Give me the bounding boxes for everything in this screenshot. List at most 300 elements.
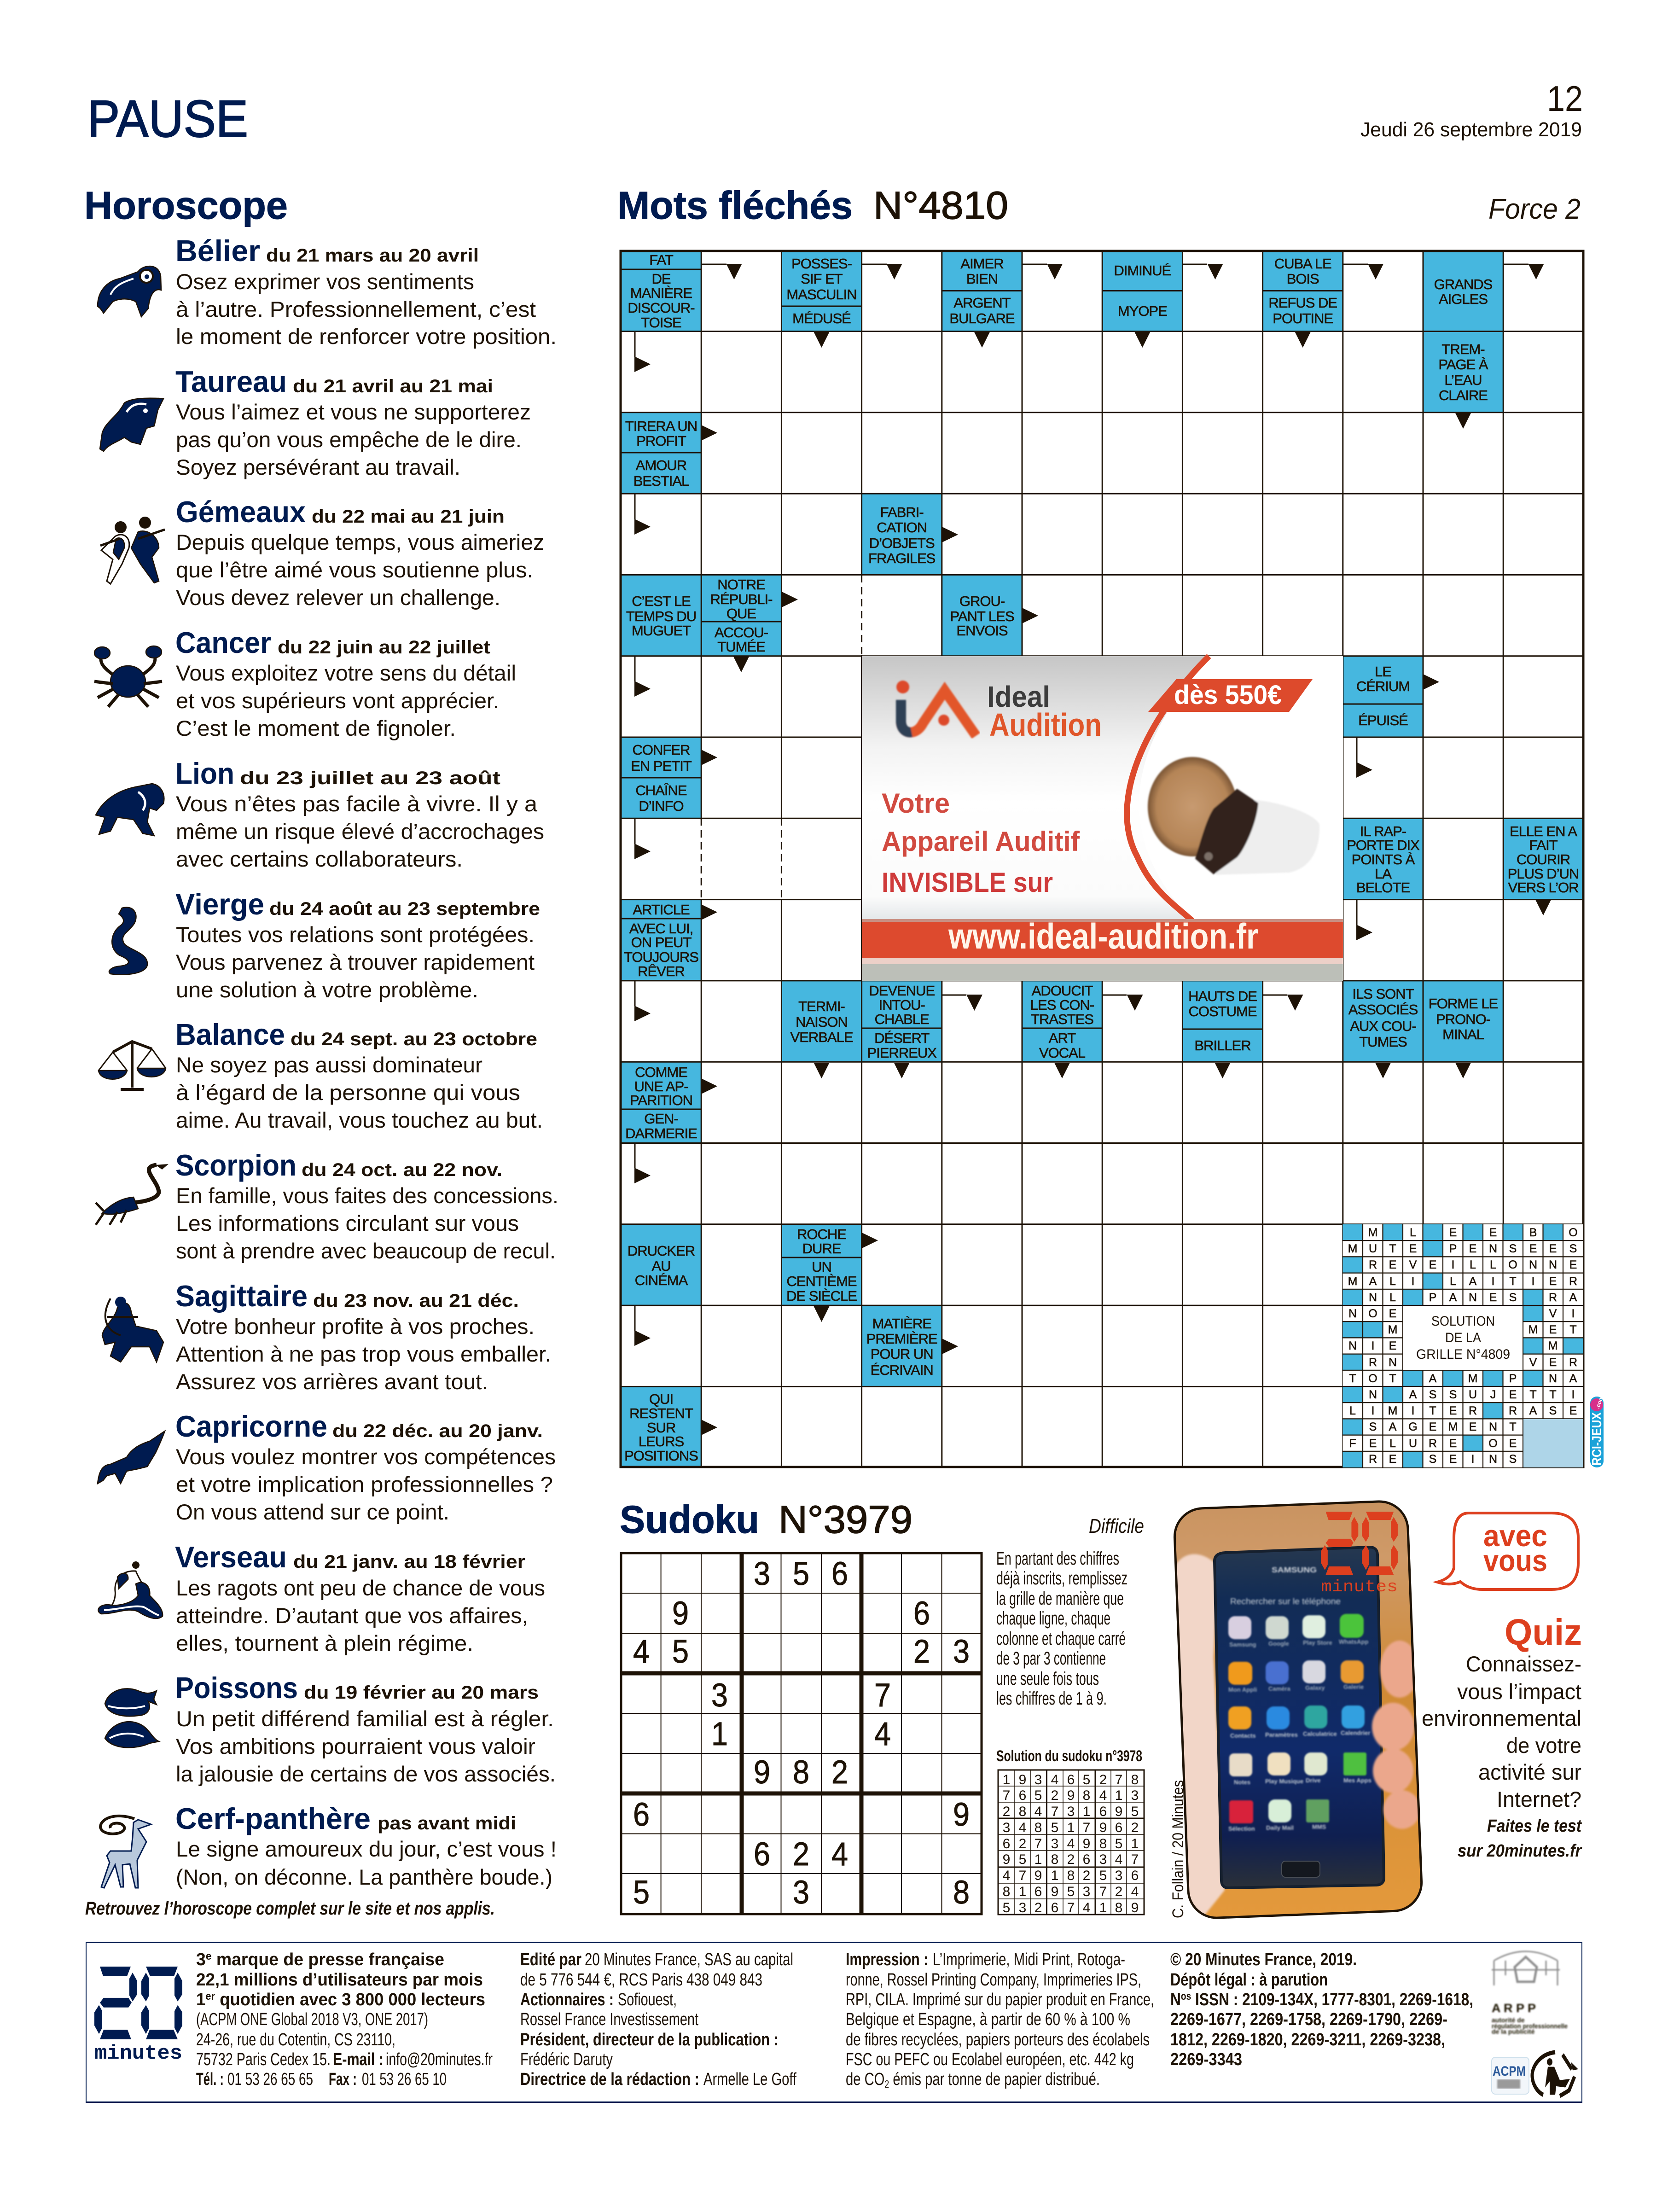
icon: scorpion bbox=[96, 1164, 169, 1225]
clue: hauts de costume / briller bbox=[1188, 988, 1257, 1054]
solution center label bbox=[1403, 1306, 1523, 1370]
clue: confer en petit / chaine d'info: CHAÎNE bbox=[635, 782, 687, 798]
solution sudoku grid: 284731695 bbox=[1003, 1804, 1139, 1819]
solution sudoku grid: 479182536 bbox=[1003, 1868, 1139, 1883]
difficulty label: Force 2 bbox=[1488, 193, 1581, 225]
phone brand and search bar bbox=[1230, 1566, 1341, 1606]
sign: cancer bbox=[175, 626, 516, 740]
solution center label: SOLUTION bbox=[1431, 1314, 1495, 1329]
quiz heading: Quiz bbox=[1505, 1612, 1582, 1653]
clue: devenue intouchable / desert pierreux: DÉSERT bbox=[874, 1030, 930, 1046]
footer column 1: 01 53 26 65 65 bbox=[227, 2070, 313, 2089]
ad logo wordmark: Ideal bbox=[987, 680, 1050, 713]
solution letters: SAGEMENT bbox=[1369, 1420, 1517, 1433]
sign: cancer: C’est le moment de fignoler. bbox=[176, 716, 456, 740]
footer column 2: Frédéric Daruty bbox=[520, 2050, 613, 2069]
solution letters: MALILAITIER bbox=[1348, 1275, 1577, 1288]
ad slogan: Votre bbox=[882, 788, 950, 819]
solution letters: NLPANESRA bbox=[1369, 1291, 1577, 1304]
sign: verseau: du 21 janv. au 18 février bbox=[293, 1552, 525, 1572]
ad slogan: Appareil Auditif bbox=[882, 826, 1080, 857]
footer column 4: 2269-3343 bbox=[1170, 2050, 1242, 2069]
footer column 1: 01 53 26 65 10 bbox=[362, 2070, 447, 2089]
logo: 20 minutes red: minutes bbox=[1321, 1578, 1398, 1596]
clue: tirera un profit / amour bestial: PROFIT bbox=[636, 433, 686, 449]
sudoku instructions: chaque ligne, chaque bbox=[996, 1608, 1110, 1629]
sign: taureau: Soyez persévérant au travail. bbox=[176, 455, 460, 479]
app labels bbox=[1228, 1638, 1372, 1832]
clue: qui restent sur leurs positions bbox=[624, 1391, 698, 1464]
sign: cerf-panthere: (Non, on déconne. La panthère boude.) bbox=[176, 1865, 552, 1889]
sudoku digits: 9 bbox=[672, 1595, 689, 1632]
clue: matiere premiere pour un ecrivain bbox=[866, 1316, 937, 1378]
heading: sudoku number: N°3979 bbox=[779, 1498, 912, 1541]
clue: forme le pronominal: MINAL bbox=[1442, 1026, 1484, 1042]
clue: trempage a l'eau claire bbox=[1438, 341, 1488, 403]
sign: belier: le moment de renforcer votre position. bbox=[176, 324, 557, 349]
sudoku grid lines bbox=[621, 1553, 982, 1914]
logo: 20 minutes navy: minutes bbox=[94, 2042, 182, 2065]
sudoku digits: 4 bbox=[831, 1836, 848, 1873]
sign: sagittaire bbox=[175, 1279, 551, 1394]
sudoku digits: 2 bbox=[793, 1836, 809, 1873]
app labels: Play Musique bbox=[1265, 1778, 1303, 1785]
app icons bbox=[1228, 1614, 1366, 1823]
clue: il rapporte dix points a la belote bbox=[1347, 823, 1420, 896]
clue: groupant les envois bbox=[950, 593, 1014, 639]
clue: qui restent sur leurs positions: SUR bbox=[647, 1420, 675, 1436]
clue: groupant les envois: PANT LES bbox=[950, 608, 1014, 624]
app labels: Paramètres bbox=[1265, 1731, 1298, 1738]
footer column 4 bbox=[1170, 1950, 1473, 2069]
sudoku digits: 2 bbox=[831, 1754, 848, 1791]
left hand bbox=[1177, 1553, 1226, 1915]
clue: comme une apparition / gendarmerie: COMME bbox=[635, 1064, 687, 1080]
solution letters: RESEINS bbox=[1369, 1453, 1517, 1466]
sudoku digits: 9 bbox=[953, 1797, 970, 1833]
clue: confer en petit / chaine d'info: CONFER bbox=[633, 742, 690, 758]
footer column 3: Impression : bbox=[846, 1950, 928, 1969]
sign: taureau: du 21 avril au 21 mai bbox=[293, 376, 493, 396]
clue: diminue / myope: MYOPE bbox=[1118, 303, 1167, 319]
footer column 2: de 5 776 544 €, RCS Paris 438 049 843 bbox=[520, 1970, 762, 1990]
icon: belier bbox=[98, 266, 161, 317]
app labels: WhatsApp bbox=[1339, 1638, 1368, 1645]
solution sudoku heading: Solution du sudoku n°3978 bbox=[996, 1747, 1142, 1765]
sign: vierge: une solution à votre problème. bbox=[176, 978, 478, 1002]
footer column 1 bbox=[196, 1950, 493, 2089]
sign: capricorne: et votre implication professionnelles ? bbox=[176, 1472, 553, 1496]
sign: balance: Balance bbox=[175, 1018, 285, 1051]
sign: scorpion: Scorpion bbox=[175, 1148, 296, 1182]
footer column 4: © 20 Minutes France, 2019. bbox=[1170, 1950, 1357, 1969]
app labels: Sélection bbox=[1228, 1825, 1255, 1832]
icon: taureau bbox=[100, 398, 163, 451]
sudoku digits: 5 bbox=[672, 1634, 689, 1670]
ad logo wordmark: Audition bbox=[989, 707, 1102, 743]
clue: article / avec lui on peut toujours rever: RÊVER bbox=[638, 963, 685, 979]
clue: confer en petit / chaine d'info bbox=[631, 742, 692, 814]
footer column 1: 3 bbox=[196, 1950, 206, 1969]
heading: mots fleches: Mots fléchés bbox=[617, 184, 853, 227]
clue: cuba le bois / refus de poutine bbox=[1268, 256, 1337, 326]
sign: belier: Osez exprimer vos sentiments bbox=[176, 269, 474, 294]
sudoku instructions: les chiffres de 1 à 9. bbox=[996, 1688, 1107, 1709]
badge: rci-jeux: RCI-JEUX bbox=[1590, 1412, 1604, 1466]
quiz text: activité sur bbox=[1478, 1760, 1581, 1784]
sign: balance bbox=[175, 1018, 543, 1132]
solution letters bbox=[1348, 1226, 1578, 1466]
sign: balance: du 24 sept. au 23 octobre bbox=[291, 1029, 537, 1049]
sign: vierge bbox=[175, 887, 540, 1002]
solution letters: MUTEPENSEES bbox=[1348, 1242, 1577, 1255]
sign: capricorne: Capricorne bbox=[175, 1409, 327, 1443]
footer column 3: de CO bbox=[846, 2070, 896, 2089]
sign: vierge: Toutes vos relations sont protégées. bbox=[176, 922, 535, 947]
clue: forme le pronominal: FORME LE bbox=[1429, 995, 1498, 1012]
clue: adoucit les contrastes / art vocal: VOCAL bbox=[1039, 1045, 1086, 1061]
footer column 3 bbox=[846, 1950, 1154, 2090]
clue: c'est le temps du muguet: TEMPS DU bbox=[626, 608, 696, 624]
clue: drucker au cinema bbox=[628, 1243, 695, 1288]
clue: trempage a l'eau claire: TREM- bbox=[1441, 341, 1485, 357]
app labels: Samsung bbox=[1229, 1641, 1256, 1648]
sign: belier bbox=[175, 234, 557, 349]
app labels: Galaxy bbox=[1305, 1684, 1325, 1691]
clue: possessif et masculin / meduse: SIF ET bbox=[801, 271, 843, 287]
clue: drucker au cinema: DRUCKER bbox=[628, 1243, 695, 1259]
sign: scorpion: du 24 oct. au 22 nov. bbox=[302, 1160, 502, 1180]
sign: balance: Ne soyez pas aussi dominateur bbox=[176, 1053, 482, 1077]
sign: sagittaire: Attention à ne pas trop vous emballer. bbox=[176, 1342, 551, 1366]
header: page number and date: Jeudi 26 septembre 2019 bbox=[1360, 118, 1582, 141]
sign: taureau: Taureau bbox=[175, 365, 287, 398]
sign: verseau: Les ragots ont peu de chance de vous bbox=[176, 1576, 545, 1600]
sign: poissons: Poissons bbox=[175, 1671, 298, 1705]
clue: comme une apparition / gendarmerie: GEN- bbox=[644, 1111, 678, 1127]
clue: confer en petit / chaine d'info: EN PETIT bbox=[631, 758, 692, 774]
sign: capricorne: Vous voulez montrer vos compétences bbox=[176, 1444, 556, 1469]
clue: grands aigles: AIGLES bbox=[1439, 291, 1488, 307]
logo: arpp: de la publicité bbox=[1492, 2028, 1535, 2035]
clue: ils sont associes aux coutumes: AUX COU- bbox=[1350, 1018, 1416, 1034]
clue: fabrication d'objets fragiles: D’OBJETS bbox=[869, 535, 935, 551]
clue: matiere premiere pour un ecrivain: ÉCRIVAIN bbox=[871, 1362, 933, 1378]
panel: horoscope bbox=[84, 184, 558, 1919]
footer column 1: er bbox=[205, 1990, 215, 2002]
panel: sudoku bbox=[620, 1498, 1144, 1915]
solution sudoku grid: 765298413 bbox=[1003, 1788, 1139, 1803]
footer column 2 bbox=[520, 1950, 796, 2089]
clue: le cerium / epuise: LE bbox=[1375, 664, 1391, 680]
ad logo icon bbox=[896, 681, 976, 736]
clue: elle en a fait courir plus d'un vers l'or: COURIR bbox=[1517, 851, 1570, 867]
sign: balance: aime. Au travail, vous touchez au but. bbox=[176, 1108, 543, 1132]
sign: balance: à l’égard de la personne qui vous bbox=[176, 1080, 520, 1105]
clue: il rapporte dix points a la belote: IL RAP- bbox=[1360, 823, 1406, 839]
solution letters: MLEEBO bbox=[1368, 1226, 1578, 1239]
icon: poissons bbox=[105, 1688, 159, 1747]
clue: cuba le bois / refus de poutine: REFUS DE bbox=[1268, 295, 1337, 311]
clue: possessif et masculin / meduse: MÉDUSÉ bbox=[792, 310, 851, 326]
sign: cancer: Vous exploitez votre sens du détail bbox=[176, 661, 516, 685]
solution letters: RNVER bbox=[1369, 1356, 1577, 1369]
clue: article / avec lui on peut toujours rever bbox=[624, 902, 698, 979]
sign: scorpion: sont à prendre avec beaucoup de recul. bbox=[176, 1239, 556, 1263]
solution letters: TOTAMPNA bbox=[1349, 1372, 1577, 1385]
footer column 3: de fibres recyclées, papiers porteurs des écolabels bbox=[846, 2030, 1150, 2049]
solution letters: LIMITERRASE bbox=[1349, 1404, 1577, 1417]
header: page number and date: 12 bbox=[1547, 78, 1583, 119]
sign: verseau: atteindre. D’autant que vos affaires, bbox=[176, 1603, 528, 1628]
ad url: www.ideal-audition.fr bbox=[948, 916, 1258, 956]
icon: balance bbox=[99, 1042, 166, 1089]
clue: ils sont associes aux coutumes bbox=[1348, 986, 1418, 1050]
dashed cell separators bbox=[700, 575, 863, 900]
clue: trempage a l'eau claire: CLAIRE bbox=[1439, 387, 1488, 403]
clue: ils sont associes aux coutumes: ASSOCIÉS bbox=[1348, 1001, 1418, 1018]
sudoku digits: 4 bbox=[633, 1634, 650, 1670]
ad product: hearing aid and coin bbox=[1148, 757, 1319, 875]
sudoku digits bbox=[633, 1556, 970, 1911]
clue: fabrication d'objets fragiles: FABRI- bbox=[880, 504, 924, 520]
app labels: Caméra bbox=[1268, 1685, 1290, 1692]
sudoku digits: 6 bbox=[633, 1797, 650, 1833]
ad price banner: dès 550€ bbox=[1174, 680, 1282, 710]
clue: roche dure / un centieme de siecle: UN bbox=[812, 1259, 831, 1275]
clue: ils sont associes aux coutumes: ILS SONT bbox=[1352, 986, 1414, 1002]
sign: gemeaux: du 22 mai au 21 juin bbox=[312, 506, 505, 527]
solution sudoku grid: 532674189 bbox=[1003, 1900, 1139, 1915]
sign: capricorne: du 22 déc. au 20 janv. bbox=[332, 1421, 543, 1441]
sudoku instructions: En partant des chiffres bbox=[996, 1548, 1119, 1569]
clue: comme une apparition / gendarmerie bbox=[625, 1064, 697, 1141]
sign: gemeaux: Depuis quelque temps, vous aimeriez bbox=[176, 530, 544, 554]
clue: cuba le bois / refus de poutine: CUBA LE bbox=[1274, 256, 1331, 272]
sudoku instructions bbox=[996, 1548, 1127, 1709]
clue: c'est le temps du muguet: C’EST LE bbox=[632, 593, 691, 609]
sign: vierge: du 24 août au 23 septembre bbox=[269, 899, 540, 919]
sign: sagittaire: Assurez vos arrières avant tout. bbox=[176, 1369, 488, 1394]
solution letters: NIEM bbox=[1348, 1339, 1558, 1352]
crossword clue cell fills bbox=[621, 250, 1583, 1468]
clue: elle en a fait courir plus d'un vers l'or: FAIT bbox=[1529, 837, 1558, 853]
clue: devenue intouchable / desert pierreux: INTOU- bbox=[879, 997, 925, 1013]
icon: vierge bbox=[109, 908, 147, 975]
clue: terminaison verbale: TERMI- bbox=[798, 998, 845, 1014]
sudoku digits: 6 bbox=[831, 1556, 848, 1592]
footer column 1: Tél. : bbox=[196, 2070, 224, 2089]
logo: acpm: ACPM bbox=[1493, 2064, 1526, 2079]
app labels: MMS bbox=[1312, 1823, 1326, 1830]
clue: grands aigles: GRANDS bbox=[1434, 276, 1493, 292]
sign: poissons: Un petit différend familial est à régler. bbox=[176, 1706, 554, 1731]
footer column 2: Edité par bbox=[520, 1950, 581, 1969]
sudoku digits: 8 bbox=[953, 1874, 970, 1911]
logo: 20 minutes navy bbox=[94, 1967, 182, 2065]
sign: sagittaire: Sagittaire bbox=[175, 1279, 308, 1313]
icon: recycling person bbox=[1532, 2052, 1578, 2096]
footer column 3: RPI, CILA. Imprimé sur du papier produit en France, bbox=[846, 1990, 1154, 2009]
footer column 3: FSC ou PEFC ou Ecolabel européen, etc. 442 kg bbox=[846, 2050, 1134, 2069]
clue: forme le pronominal bbox=[1429, 995, 1498, 1042]
quiz text bbox=[1422, 1652, 1582, 1861]
sign: cerf-panthere bbox=[175, 1802, 557, 1889]
photo frame bbox=[1174, 1501, 1423, 1919]
footer column 4: Dépôt légal : à parution bbox=[1170, 1970, 1328, 1990]
app labels: Play Store bbox=[1303, 1639, 1332, 1646]
solution sudoku grid: 193465278 bbox=[1003, 1772, 1139, 1787]
clue: devenue intouchable / desert pierreux: PIERREUX bbox=[867, 1045, 937, 1061]
sudoku digits: 2 bbox=[913, 1634, 930, 1670]
icon: verseau bbox=[98, 1561, 163, 1618]
app labels: Drive bbox=[1306, 1777, 1321, 1784]
clue: aimer bien / argent bulgare: BIEN bbox=[966, 271, 998, 287]
clue: roche dure / un centieme de siecle: DURE bbox=[802, 1240, 841, 1257]
clue: il rapporte dix points a la belote: POINTS À bbox=[1352, 851, 1415, 867]
phone brand and search bar: Rechercher sur le téléphone bbox=[1230, 1597, 1341, 1606]
clue: le cerium / epuise bbox=[1356, 664, 1410, 728]
clue: matiere premiere pour un ecrivain: MATIÈRE bbox=[872, 1316, 931, 1332]
quiz text: Internet? bbox=[1497, 1787, 1581, 1811]
footer frame bbox=[86, 1942, 1582, 2103]
sign: lion: Lion bbox=[175, 757, 234, 790]
clue: notre republique / accoutumee: ACCOU- bbox=[715, 624, 768, 640]
clue: forme le pronominal: PRONO- bbox=[1436, 1011, 1490, 1027]
clue: fat / de maniere discourtoise: DISCOUR- bbox=[628, 300, 695, 316]
sudoku digits: 5 bbox=[793, 1556, 809, 1592]
clue: ils sont associes aux coutumes: TUMES bbox=[1359, 1034, 1407, 1050]
sign: capricorne: On vous attend sur ce point. bbox=[176, 1500, 449, 1524]
clue: terminaison verbale bbox=[790, 998, 853, 1045]
photo credit: C. Follain / 20 Minutes bbox=[1169, 1780, 1187, 1918]
crossword grid lines bbox=[621, 250, 1583, 1468]
clue: roche dure / un centieme de siecle: DE SIÈCLE bbox=[786, 1288, 857, 1304]
clue: article / avec lui on peut toujours rever: ARTICLE bbox=[633, 902, 690, 918]
clue: aimer bien / argent bulgare bbox=[949, 256, 1015, 326]
clue: roche dure / un centieme de siecle: ROCHE bbox=[797, 1226, 846, 1242]
sign: scorpion bbox=[175, 1148, 558, 1263]
clue: cuba le bois / refus de poutine: BOIS bbox=[1287, 271, 1319, 287]
footer column 4: N bbox=[1170, 1990, 1183, 2009]
clue: possessif et masculin / meduse bbox=[786, 256, 857, 326]
clue: fat / de maniere discourtoise: TOISE bbox=[641, 314, 681, 331]
sign: lion: Vous n’êtes pas facile à vivre. Il y a bbox=[176, 792, 538, 816]
sign: poissons: Vos ambitions pourraient vous valoir bbox=[176, 1734, 535, 1758]
sudoku digits: 6 bbox=[754, 1836, 770, 1873]
outer frame of grid bbox=[621, 251, 1583, 1467]
sign: verseau bbox=[175, 1540, 545, 1655]
clue: terminaison verbale: VERBALE bbox=[790, 1029, 853, 1045]
footer column 2: Président, directeur de la publication : bbox=[520, 2030, 779, 2049]
footer column 2: Directrice de la rédaction : bbox=[520, 2070, 699, 2089]
sign: belier: à l’autre. Professionnellement, c’est bbox=[176, 297, 536, 321]
quiz text: vous l’impact bbox=[1457, 1679, 1581, 1704]
clue: le cerium / epuise: ÉPUISÉ bbox=[1358, 712, 1408, 728]
logo: arpp: régulation professionnelle bbox=[1492, 2022, 1568, 2030]
clue: article / avec lui on peut toujours rever: AVEC LUI, bbox=[629, 920, 693, 937]
solution letters: REVEILLONNE bbox=[1369, 1258, 1577, 1271]
solution sudoku grid: 627349851 bbox=[1003, 1836, 1139, 1851]
app labels: Calendrier bbox=[1341, 1729, 1370, 1736]
solution letters: NOEVI bbox=[1348, 1307, 1575, 1320]
ad slogan bbox=[882, 788, 1080, 898]
clue: cuba le bois / refus de poutine: POUTINE bbox=[1273, 310, 1333, 326]
clue: tirera un profit / amour bestial: TIRERA UN bbox=[625, 418, 697, 434]
header: page number and date bbox=[1360, 78, 1583, 141]
clue: diminue / myope bbox=[1114, 262, 1171, 319]
speech bubble: avec vous bbox=[1437, 1513, 1578, 1589]
sign: scorpion: Les informations circulant sur vous bbox=[176, 1211, 519, 1235]
heading: horoscope: Horoscope bbox=[84, 184, 288, 227]
advertisement: ideal audition bbox=[862, 656, 1343, 981]
logo: arpp: autorité de bbox=[1492, 2016, 1525, 2024]
sign: poissons: la jalousie de certains de vos associés. bbox=[176, 1762, 556, 1786]
clue: article / avec lui on peut toujours rever: TOUJOURS bbox=[624, 949, 698, 965]
sign: scorpion: En famille, vous faites des concessions. bbox=[176, 1183, 558, 1208]
sudoku instructions: de 3 par 3 contienne bbox=[996, 1648, 1106, 1669]
clue: drucker au cinema: AU bbox=[651, 1258, 671, 1274]
clue: confer en petit / chaine d'info: D’INFO bbox=[639, 798, 684, 814]
clue: fabrication d'objets fragiles bbox=[868, 504, 936, 566]
sudoku digits: 3 bbox=[711, 1677, 728, 1714]
photo: hand holding smartphone bbox=[1173, 1500, 1423, 1919]
clue: c'est le temps du muguet: MUGUET bbox=[632, 623, 691, 639]
clue: notre republique / accoutumee: RÉPUBLI- bbox=[710, 591, 772, 607]
phone home button bbox=[1282, 1861, 1320, 1877]
solution sudoku grid: 348517962 bbox=[1003, 1820, 1139, 1835]
logo: 20 minutes red bbox=[1321, 1512, 1398, 1596]
sign: belier: du 21 mars au 20 avril bbox=[266, 245, 479, 266]
app labels: Calculatrice bbox=[1303, 1730, 1337, 1737]
solution sudoku grid: 816953724 bbox=[1003, 1884, 1139, 1899]
difficulty label: Difficile bbox=[1089, 1515, 1144, 1537]
sudoku instructions: colonne et chaque carré bbox=[996, 1629, 1126, 1649]
clue: fat / de maniere discourtoise bbox=[628, 252, 695, 331]
clue: devenue intouchable / desert pierreux bbox=[867, 983, 937, 1061]
clue: il rapporte dix points a la belote: LA bbox=[1375, 866, 1392, 882]
sudoku digits: 1 bbox=[711, 1716, 728, 1752]
clue: fabrication d'objets fragiles: CATION bbox=[877, 519, 927, 536]
clue: notre republique / accoutumee bbox=[710, 576, 772, 655]
sign: vierge: Vierge bbox=[175, 887, 264, 921]
sudoku digits: 3 bbox=[953, 1634, 970, 1670]
sign: gemeaux: que l’être aimé vous soutienne plus. bbox=[176, 558, 533, 582]
clue: notre republique / accoutumee: QUE bbox=[726, 605, 756, 622]
solution center label: DE LA bbox=[1445, 1330, 1481, 1345]
heading: sudoku: Sudoku bbox=[620, 1498, 759, 1541]
panel: solution grid 4809 bbox=[1343, 1224, 1583, 1467]
footer column 1: info@20minutes.fr bbox=[386, 2050, 493, 2069]
solution letters: FELUREOE bbox=[1349, 1437, 1517, 1450]
quiz text: environnemental bbox=[1422, 1706, 1581, 1730]
sign: cancer: Cancer bbox=[175, 626, 271, 659]
clue: fat / de maniere discourtoise: DE bbox=[651, 271, 671, 287]
sign: sagittaire: Votre bonheur profite à vos proches. bbox=[176, 1314, 535, 1339]
solution sudoku grid bbox=[998, 1770, 1144, 1915]
sign: taureau: pas qu’on vous empêche de le dire. bbox=[176, 427, 522, 452]
footer column 3: L’Imprimerie, Midi Print, Rotoga- bbox=[933, 1950, 1125, 1969]
solution grid lines bbox=[1343, 1224, 1583, 1467]
clue: fat / de maniere discourtoise: FAT bbox=[649, 252, 674, 268]
clue: fat / de maniere discourtoise: MANIÈRE bbox=[630, 285, 692, 301]
app labels: Daily Mail bbox=[1266, 1824, 1294, 1831]
sign: cerf-panthere: pas avant midi bbox=[378, 1813, 516, 1834]
sign: lion: du 23 juillet au 23 août bbox=[240, 768, 500, 788]
clue: grands aigles bbox=[1434, 276, 1493, 307]
clue: elle en a fait courir plus d'un vers l'or: PLUS D’UN bbox=[1508, 866, 1579, 882]
quiz text: sur 20minutes.fr bbox=[1458, 1841, 1582, 1861]
